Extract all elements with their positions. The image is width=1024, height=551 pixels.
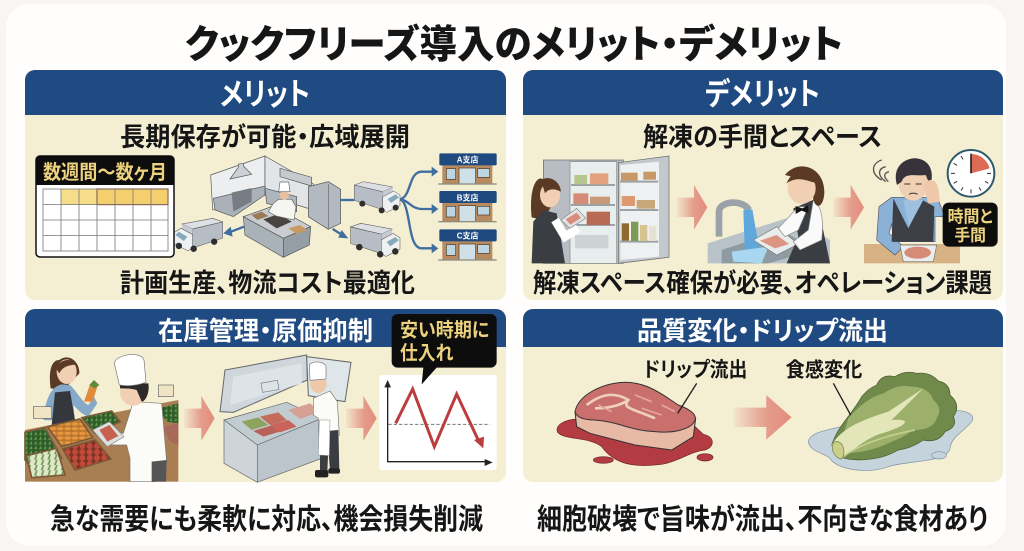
arrow [733,395,792,440]
illustrations: kitchen, trucks, shops [174,153,497,261]
icon: shop A: A支店 [457,155,479,165]
icon: truck right top [354,182,400,213]
icon: truck right bottom [351,223,400,258]
subheading: long-term storage: 長期保存が可能・広域展開 [120,122,410,152]
icon: clock [948,150,994,197]
header: inventory [25,309,506,347]
panel: demerit top-right [523,70,1003,300]
label: drip: ドリップ流出 [643,359,747,382]
panel: inventory bottom-left [25,309,506,482]
icon: staff opening refrigerator [531,178,586,263]
panel: quality change bottom-right [523,309,1003,482]
subheading: thawing effort and space: 解凍の手間とスペース [643,122,882,152]
icon: truck left [174,218,223,252]
icon: chest freezer [220,355,351,482]
header text: merit: メリット [220,77,310,112]
label: texture change: 食感変化 [786,358,862,382]
callout: buy in cheap period [392,314,497,384]
calendar: 数週間〜数ヶ月 [43,161,167,184]
illustrations: sourcing, freezer, chart [25,314,497,482]
icon: tired worker at table [864,158,960,263]
chart: price line with cheap period [379,375,497,470]
header: demerit [523,70,1003,115]
icon: staff thawing under running water [708,166,830,263]
icon: shop B: B支店 [457,192,479,202]
callout: buy in cheap period: 仕入れ [400,342,453,364]
arrow [184,396,215,441]
arrow [346,396,377,441]
caption: planned production: 計画生産、物流コスト最適化 [120,268,415,298]
panel: merit top-left [25,70,506,300]
header: quality change [523,309,1003,347]
callout: buy in cheap period: 安い時期に [400,320,489,342]
icon: shop A [438,153,497,185]
icon: market scene with staff and chef [25,354,178,482]
arrow [833,185,864,230]
callout: time and effort: 時間と [948,206,993,226]
icon: open refrigerator [543,156,669,263]
callout: time and effort: 手間 [954,225,986,245]
arrow [677,185,707,230]
icon: shop C: C支店 [457,231,479,241]
icon: chef at freezer [309,362,340,477]
header text: inventory: 在庫管理・原価抑制 [158,316,373,346]
title: クックフリーズ導入のメリット・デメリット [185,23,843,67]
illustrations: meat and lettuce [557,358,973,470]
icon: kitchen [211,156,341,257]
illustrations: thawing sequence [531,150,998,263]
icon: shop B [438,191,497,222]
icon: wilted lettuce [808,372,973,470]
header text: quality change: 品質変化・ドリップ流出 [637,316,888,346]
icon: shop C [438,229,497,261]
icon: meat with drip [557,382,713,466]
arrows: delivery routes [223,167,438,253]
caption: flexible response to demand: 急な需要にも柔軟に対応、機会損失削減 [50,503,483,536]
header text: demerit: デメリット [705,77,820,112]
calendar [36,156,174,257]
header: merit [25,70,506,115]
callout: time and effort [943,203,998,247]
